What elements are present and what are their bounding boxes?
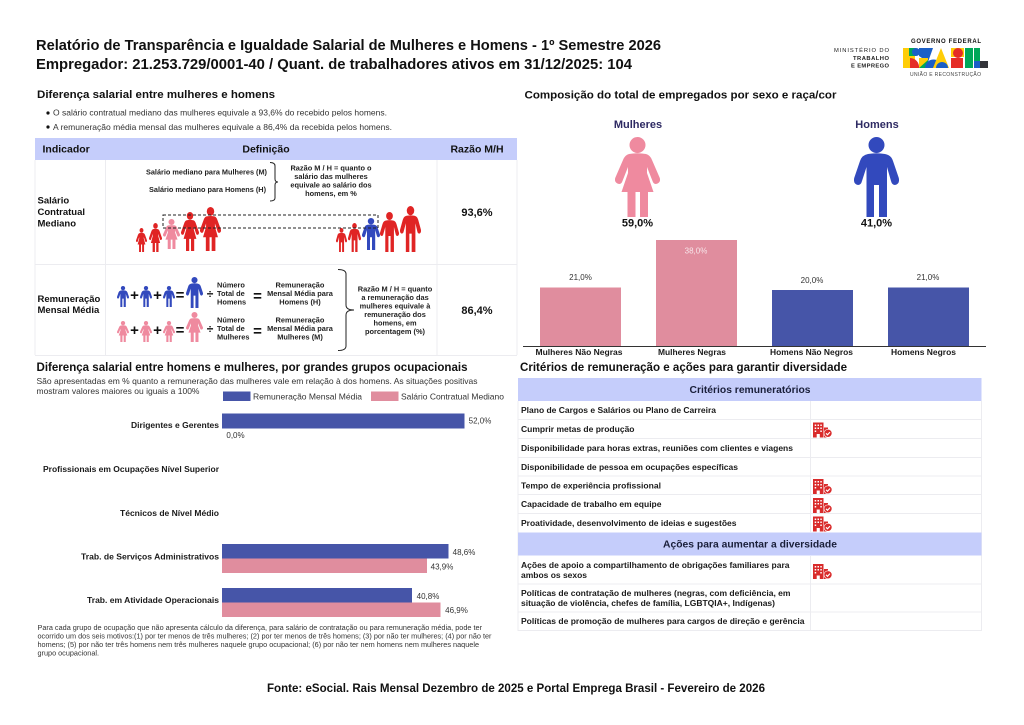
dashed median box: [163, 215, 378, 228]
figura: mulheres: 59,0%: [622, 218, 653, 230]
subtexto: mostram valores maiores ou iguais a 100%: [36, 386, 200, 396]
bar chart: composição: 21,0%: [569, 273, 592, 282]
table: critérios e ações: Capacidade de trabalho em equipe: [521, 500, 662, 509]
bar chart: grupos ocupacionais: Profissionais em Ocupações Nível Superior: [43, 465, 219, 474]
table: indicadores: Salário: [38, 196, 69, 206]
figura: homens: 41,0%: [861, 218, 892, 230]
table: critérios e ações: Políticas de contratação de mulheres (negras, com deficiência, em: [521, 589, 790, 598]
table: indicadores: Remuneração: [38, 294, 101, 305]
bullets: O salário contratual mediano das mulheres equivale a 93,6% do recebido pelos homens.: [53, 108, 387, 118]
table: critérios e ações: Políticas de promoção de mulheres para cargos de direção e gerência: [521, 617, 805, 626]
table: critérios e ações: Plano de Cargos e Salários ou Plano de Carreira: [521, 406, 717, 415]
subtexto: [36, 376, 477, 396]
bar chart: composição: Homens Negros: [891, 348, 957, 357]
table: indicadores: Indicador: [42, 144, 90, 156]
fórmula: homens: ÷: [207, 287, 214, 301]
fórmula: homens: Total de: [217, 289, 245, 298]
icons: família homens: [336, 206, 421, 252]
definição: salário mediano: Salário mediano para Mulheres (M): [146, 168, 268, 176]
table: indicadores: Mensal Média: [38, 305, 100, 316]
icons: empresa com critério: [813, 422, 832, 579]
table: critérios e ações: Ações para aumentar a diversidade: [663, 540, 837, 550]
fórmula: mulheres: Mulheres (M): [277, 332, 323, 342]
heading: diferença salarial: Diferença salarial entre mulheres e homens: [37, 89, 275, 101]
fórmula: mulheres: Mulheres: [217, 332, 249, 342]
table: critérios e ações: Disponibilidade de pessoa em ocupações específicas: [521, 463, 739, 472]
fórmula: mulheres: ÷: [207, 322, 214, 336]
bar chart: grupos ocupacionais: 46,9%: [445, 606, 468, 615]
bar chart: composição: Mulheres Negras: [658, 348, 727, 357]
bar chart: grupos ocupacionais: 48,6%: [453, 548, 475, 557]
bullets: [46, 108, 392, 132]
fórmula: mulheres: Remuneração: [276, 316, 325, 324]
title: Relatório de Transparência e Igualdade Salarial de Mulheres e Homens - 1º Semestre 2026: [36, 38, 661, 54]
bar chart: grupos ocupacionais: [43, 414, 491, 617]
brace and razão note: remuneração dos: [364, 310, 426, 319]
table: indicadores: Contratual: [38, 207, 85, 218]
title: Empregador: 21.253.729/0001-40 / Quant. de trabalhadores ativos em 31/12/2025: 104: [36, 57, 632, 73]
bar chart: grupos ocupacionais: Dirigentes e Gerentes: [131, 421, 220, 430]
fórmula: homens: Homens: [217, 298, 246, 306]
definição: salário mediano: equivale ao salário dos: [290, 180, 372, 190]
fórmula: mulheres: +: [130, 322, 139, 339]
subtexto: São apresentadas em % quanto a remuneração das mulheres vale em relação à dos homens. As situações positivas: [36, 376, 477, 386]
heading: composição: Composição do total de empregados por sexo e raça/cor: [524, 90, 837, 102]
fonte: Fonte: eSocial. Rais Mensal Dezembro de 2025 e Portal Emprega Brasil - Fevereiro de 2026: [267, 683, 765, 695]
bar chart: composição: 20,0%: [801, 276, 823, 285]
logo: ministério: MINISTÉRIO DO: [834, 47, 889, 54]
heading: critérios: Critérios de remuneração e ações para garantir diversidade: [520, 360, 847, 374]
fórmula: mulheres: =: [253, 323, 262, 340]
bar chart: grupos ocupacionais: 0,0%: [226, 431, 245, 440]
logo: governo federal: GOVERNO FEDERAL: [911, 39, 981, 45]
figura: homens: Homens: [855, 119, 899, 131]
logo: ministério: E EMPREGO: [851, 64, 889, 70]
table: critérios e ações: [518, 378, 982, 631]
legend: Remuneração Mensal Média: [253, 392, 362, 402]
legend: [223, 392, 504, 402]
fórmula: homens: =: [176, 287, 185, 304]
table: indicadores: 93,6%: [461, 207, 493, 219]
logo: ministério: [834, 47, 889, 70]
logo: ministério: TRABALHO: [853, 56, 889, 62]
table: indicadores: Razão M/H: [450, 144, 504, 156]
bar chart: composição: [523, 240, 986, 357]
fórmula: homens: =: [253, 288, 262, 305]
brace and razão note: a remuneração das: [361, 293, 429, 302]
fórmula: homens: +: [153, 287, 162, 304]
footnote: ocorrido um dos seis motivos:(1) por ter menos de três mulheres; (2) por ter menos de três homens; (3) por não ter mulheres; (4) por não ter: [38, 634, 492, 640]
title: [36, 38, 661, 73]
table: indicadores: 86,4%: [461, 305, 493, 317]
fórmula: homens: Número: [217, 280, 245, 290]
table: critérios e ações: Critérios remuneratórios: [690, 385, 811, 396]
definição: salário mediano: Salário mediano para Homens (H): [149, 185, 267, 194]
table: critérios e ações: Tempo de experiência profissional: [521, 482, 661, 490]
table: critérios e ações: Proatividade, desenvolvimento de ideias e sugestões: [521, 519, 737, 528]
definição: salário mediano: homens, em %: [305, 189, 357, 198]
definição: salário mediano: salário das mulheres: [294, 172, 368, 181]
bar chart: composição: 21,0%: [917, 273, 939, 282]
bar chart: grupos ocupacionais: Técnicos de Nível Médio: [120, 509, 219, 518]
logo: governo federal: [903, 39, 988, 78]
bar chart: grupos ocupacionais: 40,8%: [417, 592, 439, 601]
definição: salário mediano: Razão M / H = quanto o: [290, 164, 372, 172]
bar chart: grupos ocupacionais: Trab. em Atividade Operacionais: [87, 596, 220, 605]
brace and razão note: homens, em: [373, 318, 417, 328]
figura: homens: [854, 119, 899, 230]
icons: família mulheres: [136, 207, 221, 252]
table: indicadores: Definição: [242, 144, 290, 156]
bar chart: grupos ocupacionais: 43,9%: [431, 562, 453, 572]
fórmula: homens: Mensal Média para: [267, 289, 334, 298]
definição: salário mediano: [146, 162, 372, 201]
logo: governo federal: UNIÃO E RECONSTRUÇÃO: [910, 71, 981, 78]
bullets: A remuneração média mensal das mulheres equivale a 86,4% da recebida pelos homens.: [53, 122, 392, 132]
table: critérios e ações: ambos os sexos: [521, 571, 588, 580]
fórmula: mulheres: [117, 312, 334, 342]
fórmula: mulheres: Total de: [217, 324, 245, 333]
footnote: Para cada grupo de ocupação que não apresenta cálculo da diferença, para salário de contratação ou para remuneração média, pode ter: [38, 625, 483, 632]
fórmula: homens: Homens (H): [279, 298, 321, 306]
fórmula: mulheres: Mensal Média para: [267, 324, 334, 333]
table: indicadores: [35, 138, 517, 356]
footnote: [38, 625, 492, 658]
fórmula: mulheres: +: [153, 322, 162, 339]
fórmula: homens: [117, 277, 334, 308]
fórmula: homens: +: [130, 287, 139, 304]
bar chart: grupos ocupacionais: Trab. de Serviços Administrativos: [81, 552, 220, 562]
figura: mulheres: Mulheres: [614, 119, 662, 131]
brace and razão note: mulheres equivale à: [360, 302, 431, 310]
brace and razão note: porcentagem (%): [365, 327, 426, 336]
table: critérios e ações: Disponibilidade para horas extras, reuniões com clientes e viagens: [521, 444, 794, 453]
fórmula: mulheres: =: [176, 322, 185, 339]
bar chart: composição: 38,0%: [685, 246, 707, 256]
figura: mulheres: [614, 119, 662, 230]
heading: grupos ocupacionais: Diferença salarial entre homens e mulheres, por grandes grupos ocupacionais: [36, 360, 468, 374]
bar chart: composição: Homens Não Negros: [770, 348, 854, 357]
legend: Salário Contratual Mediano: [401, 392, 504, 402]
fórmula: homens: Remuneração: [276, 280, 325, 290]
table: critérios e ações: Cumprir metas de produção: [521, 425, 635, 434]
brace and razão note: [338, 270, 433, 350]
footnote: grupo ocupacional.: [38, 650, 99, 658]
table: indicadores: Mediano: [38, 218, 76, 230]
brace and razão note: Razão M / H = quanto: [358, 284, 433, 294]
bar chart: grupos ocupacionais: 52,0%: [469, 416, 491, 426]
table: critérios e ações: situação de violência, chefes de família, LGBTQIA+, Indígenas): [521, 599, 775, 608]
table: critérios e ações: Ações de apoio a compartilhamento de obrigações familiares para: [521, 561, 790, 570]
bar chart: composição: Mulheres Não Negras: [536, 348, 623, 357]
footnote: homens; (5) por não ter três homens nem três mulheres naquele grupo ocupacional; (6) por não ter nem homens nem mulheres naquele: [38, 642, 479, 649]
fórmula: mulheres: Número: [217, 316, 245, 324]
